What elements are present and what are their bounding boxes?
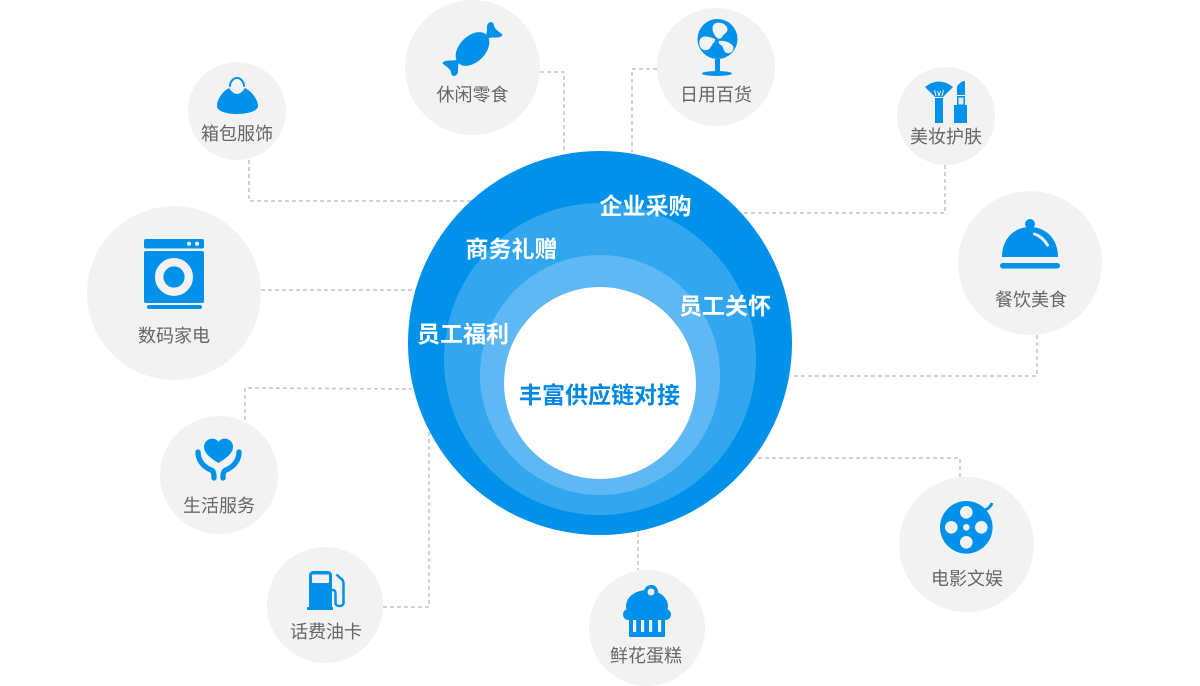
node: phone and fuel cards — [267, 547, 383, 663]
icon: food cloche — [1000, 219, 1060, 268]
label: employee benefits: 员工福利 — [417, 321, 509, 347]
node: snacks — [405, 0, 540, 135]
node: digital appliances: 数码家电 — [138, 326, 210, 346]
icon: cupcake — [623, 585, 671, 637]
center white circle — [504, 287, 696, 479]
node: life services — [160, 416, 278, 534]
label: business gifts: 商务礼赠 — [466, 236, 558, 262]
icon: fan — [698, 19, 738, 76]
icon: brush and lipstick — [925, 81, 967, 123]
icon: handbag — [217, 78, 258, 114]
icon: candy — [443, 22, 502, 76]
node: phone and fuel cards: 话费油卡 — [290, 622, 362, 642]
icon: washing machine — [144, 239, 204, 309]
node: movies and entertainment: 电影文娱 — [931, 569, 1003, 589]
label: employee care: 员工关怀 — [679, 293, 771, 319]
node: daily goods: 日用百货 — [680, 85, 752, 105]
middle ring — [444, 203, 756, 515]
center title: 丰富供应链对接 — [519, 382, 680, 408]
node: flowers and cakes: 鲜花蛋糕 — [610, 646, 682, 666]
outer ring — [408, 151, 792, 535]
node: bags and apparel — [188, 62, 286, 160]
node: beauty: 美妆护肤 — [910, 127, 982, 147]
node: life services: 生活服务 — [183, 496, 255, 516]
node: beauty — [897, 67, 995, 165]
node: snacks: 休闲零食 — [436, 85, 508, 105]
concentric circle diagram — [408, 151, 792, 535]
inner ring — [480, 255, 720, 495]
label: enterprise purchasing: 企业采购 — [600, 193, 692, 219]
icon: fuel pump — [307, 571, 344, 610]
node: digital appliances — [87, 206, 261, 380]
node: dining: 餐饮美食 — [995, 290, 1067, 310]
node: movies and entertainment — [899, 477, 1034, 612]
icon: hands holding heart — [198, 439, 239, 478]
node: bags and apparel: 箱包服饰 — [201, 124, 273, 144]
icon: film reel — [940, 501, 993, 554]
node: dining — [958, 191, 1102, 335]
node: daily goods — [657, 8, 775, 126]
node: flowers and cakes — [589, 570, 705, 686]
